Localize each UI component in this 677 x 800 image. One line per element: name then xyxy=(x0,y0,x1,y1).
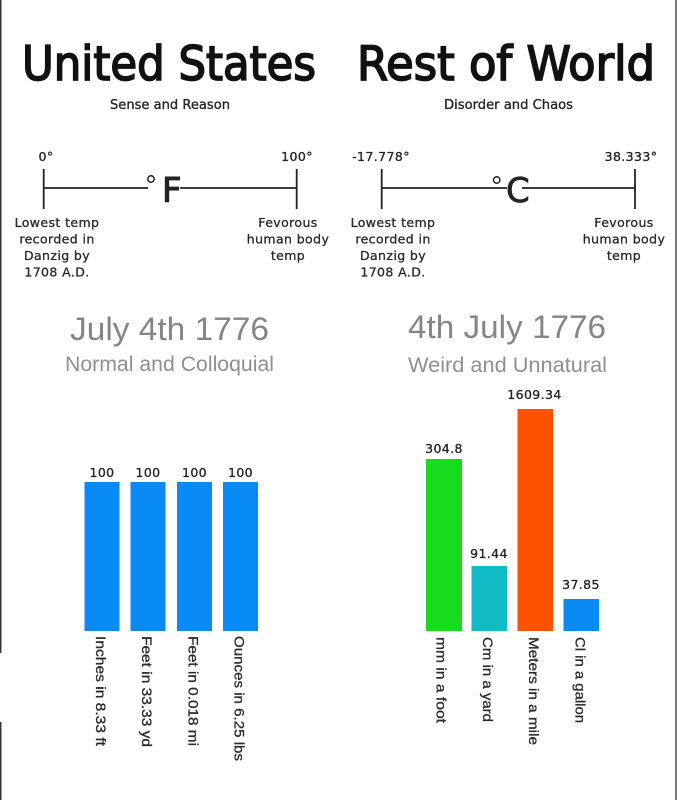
bar chart: United States: Inches in 8.33 ft xyxy=(93,636,109,746)
note: fevorous body temp, Celsius: Fevorous xyxy=(594,215,654,230)
note: lowest temp, Celsius: recorded in xyxy=(355,232,431,246)
bar chart: Rest of World: 1609.34 xyxy=(507,387,562,402)
value: 0 degrees: 0° xyxy=(38,149,54,164)
bar chart: Rest of World: mm in a foot xyxy=(434,637,450,723)
subheading: Weird and Unnatural: Weird and Unnatural xyxy=(408,354,607,377)
bar chart: Rest of World xyxy=(425,387,600,745)
bar chart: United States: 100 xyxy=(89,465,115,480)
heading: July 4th 1776: July 4th 1776 xyxy=(70,311,269,347)
subtitle: Disorder and Chaos: Disorder and Chaos xyxy=(444,98,573,113)
note: lowest temp, Fahrenheit: 1708 A.D. xyxy=(24,264,90,280)
value: 38.333 degrees: 38.333° xyxy=(605,149,657,164)
note: fevorous body temp, Fahrenheit: human body xyxy=(247,232,329,246)
bar chart: United States: 100 xyxy=(228,465,253,480)
note: lowest temp, Fahrenheit: recorded in xyxy=(19,232,95,246)
bar chart: Rest of World: Meters in a mile xyxy=(526,637,542,745)
note: fevorous body temp, Fahrenheit: Fevorous xyxy=(258,215,318,230)
bar chart: United States: Ounces in 6.25 lbs xyxy=(232,636,248,761)
note: lowest temp, Fahrenheit: Danzig by xyxy=(24,248,90,263)
bar chart: United States xyxy=(84,465,258,761)
value: -17.778 degrees: -17.778° xyxy=(352,149,410,164)
bar chart: United States: 100 xyxy=(182,465,207,480)
heading: 4th July 1776: 4th July 1776 xyxy=(408,309,606,345)
subheading: Normal and Colloquial: Normal and Colloquial xyxy=(65,353,274,376)
Celsius unit label: C xyxy=(506,171,530,211)
Celsius scale xyxy=(351,149,665,280)
value: 100 degrees: 100° xyxy=(281,149,313,164)
note: fevorous body temp, Celsius: temp xyxy=(607,248,641,263)
bar chart: Rest of World: Cl in a gallon xyxy=(572,637,588,723)
note: lowest temp, Celsius: Lowest temp xyxy=(351,215,435,230)
Fahrenheit unit label: F xyxy=(162,171,182,211)
title: United States: United States xyxy=(22,37,316,92)
note: lowest temp, Celsius: 1708 A.D. xyxy=(360,264,426,280)
bar chart: United States: Feet in 33.33 yd xyxy=(139,636,155,747)
note: fevorous body temp, Fahrenheit: temp xyxy=(271,248,305,263)
bar chart: United States: Feet in 0.018 mi xyxy=(186,636,202,746)
bar chart: Rest of World: 304.8 xyxy=(425,441,463,456)
note: lowest temp, Celsius: Danzig by xyxy=(360,248,426,263)
note: fevorous body temp, Celsius: human body xyxy=(583,232,665,246)
Fahrenheit unit label xyxy=(148,171,182,211)
bar chart: United States: 100 xyxy=(135,465,161,480)
subtitle: Sense and Reason: Sense and Reason xyxy=(110,98,230,113)
bar chart: Rest of World: 37.85 xyxy=(562,577,600,592)
bar chart: Rest of World: 91.44 xyxy=(470,546,508,561)
Celsius unit label xyxy=(494,171,530,211)
Fahrenheit scale xyxy=(15,149,329,280)
title: Rest of World: Rest of World xyxy=(357,37,655,92)
bar chart: Rest of World: Cm in a yard xyxy=(480,637,496,722)
note: lowest temp, Fahrenheit: Lowest temp xyxy=(15,215,99,230)
